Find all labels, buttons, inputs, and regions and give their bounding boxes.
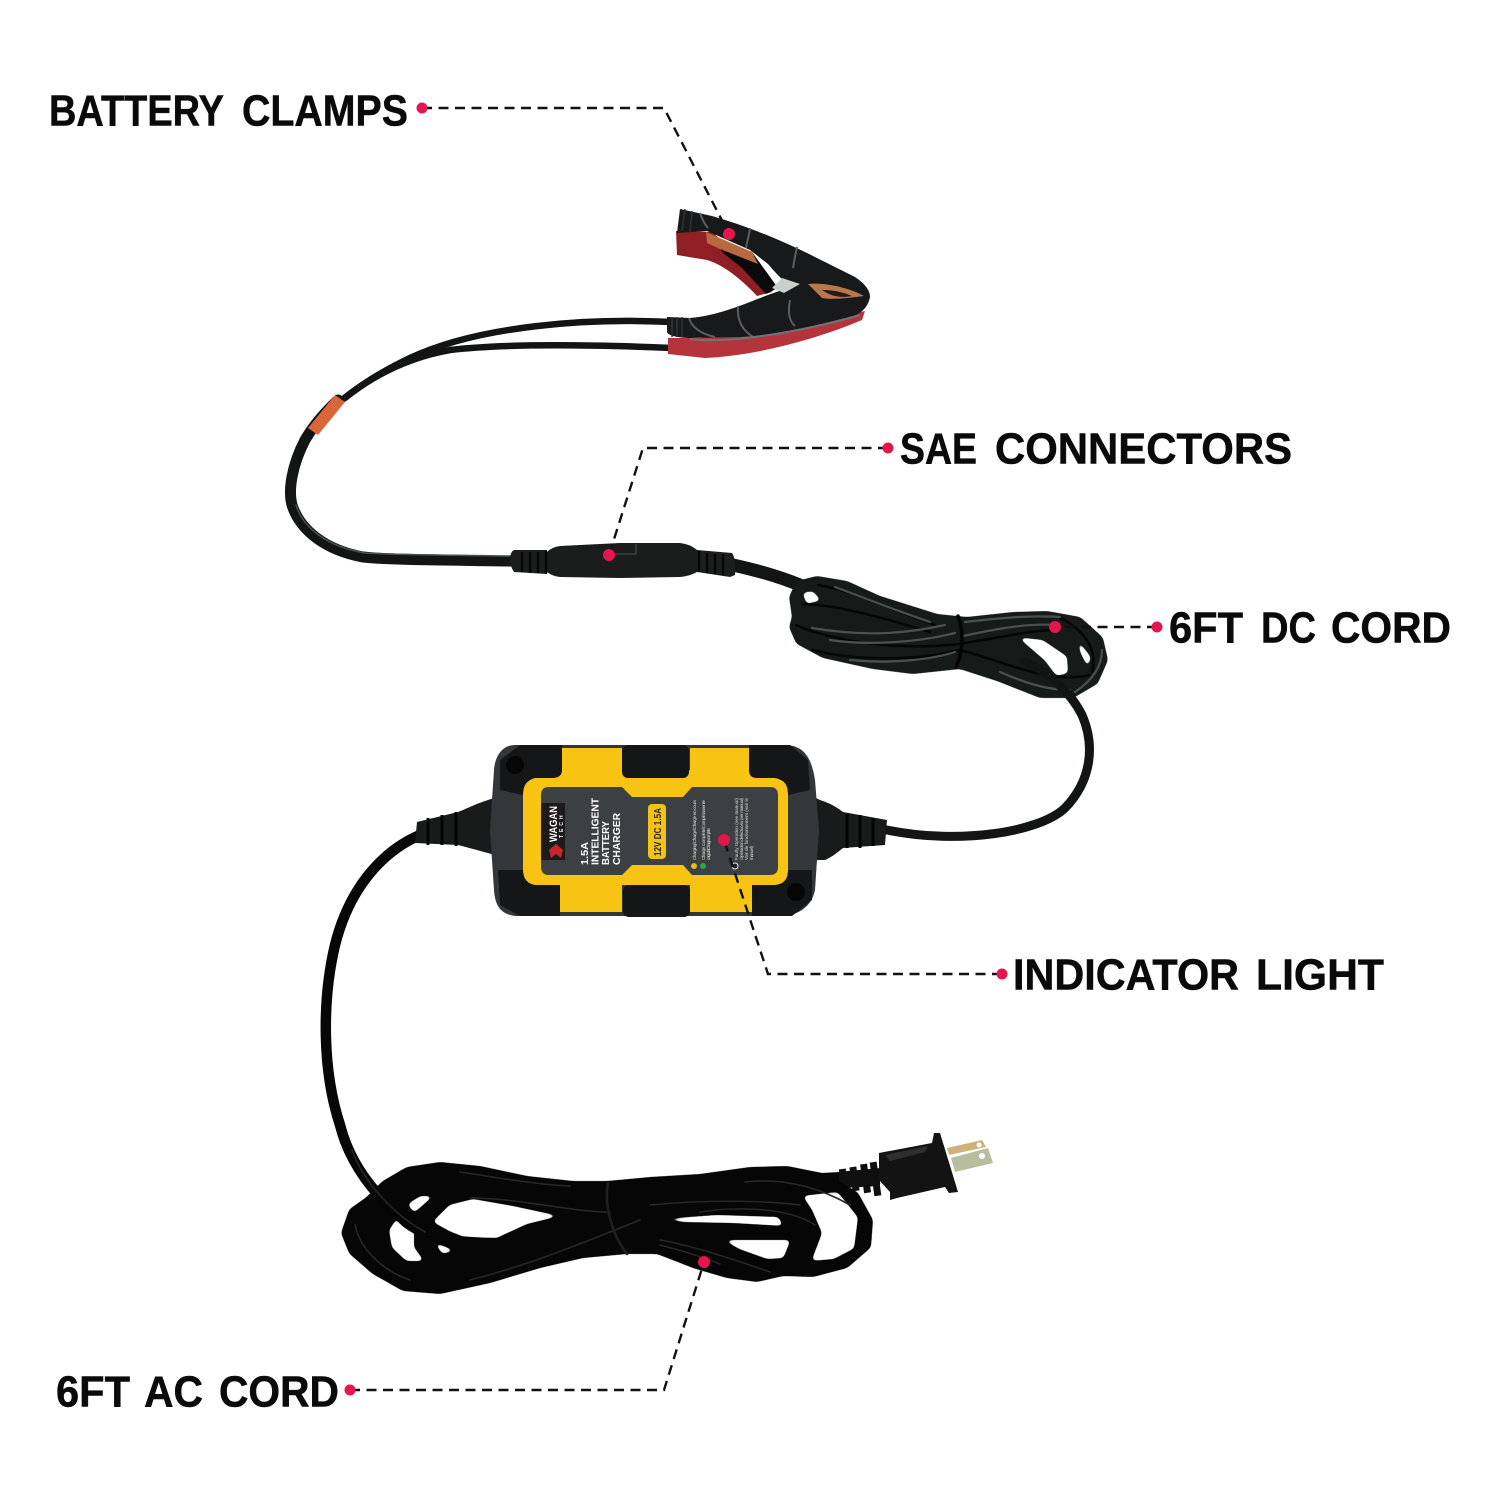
product name: CHARGER bbox=[611, 813, 623, 865]
AC plug bbox=[812, 1133, 993, 1200]
connector ribs left bbox=[510, 550, 547, 574]
red upper jaw bbox=[676, 231, 772, 296]
Wagan logo box: TECH bbox=[559, 812, 565, 838]
6ft AC cord coil bbox=[342, 1150, 872, 1293]
bottom centre pad bbox=[623, 885, 690, 917]
battery clamp leads bbox=[291, 321, 672, 561]
product name: BATTERY bbox=[600, 821, 612, 865]
plug ribbed strain relief bbox=[838, 1162, 881, 1196]
connector ribs right bbox=[697, 550, 735, 577]
top left pad bbox=[500, 745, 562, 795]
top centre pad bbox=[622, 745, 689, 778]
dark strand separators bbox=[796, 585, 1093, 677]
grey label panel bbox=[541, 787, 778, 875]
callout: AC cord: CORD bbox=[219, 1368, 339, 1416]
red lower jaw bbox=[668, 311, 865, 358]
callout: AC cord: 6FT bbox=[56, 1368, 130, 1416]
cord right of connector bbox=[733, 565, 800, 585]
indicator legend text: Charging/Charge/Charge en cours bbox=[692, 799, 697, 860]
callout: battery clamps bbox=[49, 86, 735, 240]
callout: SAE connectors bbox=[603, 424, 1292, 561]
cord end to plug bbox=[812, 1178, 850, 1180]
callout: indicator light: INDICATOR bbox=[1013, 950, 1239, 1000]
callout: indicator light: LIGHT bbox=[1256, 950, 1384, 1000]
product name: 1.5A bbox=[579, 842, 591, 865]
AC coil strand highlights bbox=[352, 1150, 850, 1280]
callout: SAE connectors: SAE bbox=[900, 424, 977, 474]
AC coil tie bbox=[607, 1183, 627, 1254]
callout: DC cord bbox=[1049, 604, 1451, 652]
6ft DC cord coil bbox=[790, 577, 1107, 836]
bottom left pad bbox=[498, 870, 560, 916]
grey strand highlights bbox=[812, 587, 1102, 692]
white LED bbox=[732, 863, 738, 869]
screw hole bottom right bbox=[787, 883, 805, 901]
right strain relief bbox=[816, 798, 887, 860]
charger bbox=[415, 745, 887, 917]
Wagan logo box: WAGAN bbox=[548, 806, 560, 842]
callout: DC cord: CORD bbox=[1331, 604, 1451, 652]
indicator legend text: Operacion defectuosa (ver manual) bbox=[739, 798, 744, 860]
yellow LED bbox=[691, 863, 697, 869]
copper jaw strip bbox=[706, 232, 758, 264]
callout: AC cord: AC bbox=[144, 1368, 203, 1416]
callout: DC cord: DC bbox=[1261, 604, 1316, 652]
connector body bbox=[547, 543, 697, 578]
callout: battery clamps: BATTERY bbox=[49, 86, 224, 136]
coil tie bbox=[956, 616, 962, 667]
Wagan logo box bbox=[541, 803, 565, 860]
voltage badge: 12V DC 1.5A bbox=[653, 808, 664, 856]
bottom right pad bbox=[752, 870, 812, 916]
charger black housing bbox=[490, 745, 819, 916]
callout: indicator light bbox=[718, 834, 1384, 1000]
top right pad bbox=[749, 745, 810, 795]
callout: DC cord: 6FT bbox=[1169, 604, 1243, 652]
DC cord to charger bbox=[887, 662, 1089, 836]
indicator legend text: Voir de fonctionnement (voir le bbox=[744, 798, 749, 860]
clamp copper tip bbox=[808, 284, 864, 299]
indicator legend text: Charge Complete/Completamente bbox=[701, 800, 706, 860]
indicator legend text bbox=[692, 798, 754, 860]
voltage badge bbox=[648, 804, 666, 859]
clamp ribbed grip bbox=[672, 209, 692, 337]
clamp grey ribs bbox=[689, 213, 860, 340]
product name: INTELLIGENT bbox=[590, 797, 602, 865]
indicator legend text: cargada/Charge complete bbox=[706, 828, 711, 860]
green LED bbox=[700, 863, 706, 869]
plug body bbox=[879, 1133, 958, 1200]
AC cord to charger bbox=[326, 835, 500, 1243]
indicator legend text: manuel) bbox=[749, 846, 754, 860]
left strain relief bbox=[415, 798, 494, 855]
red star bbox=[549, 844, 563, 858]
plug blades bbox=[947, 1140, 986, 1155]
callout: AC cord bbox=[56, 1256, 710, 1416]
clamp jaw interior bbox=[715, 238, 778, 294]
callout: battery clamps: CLAMPS bbox=[242, 86, 408, 136]
indicator legend text: Faulty Operation (see manual) bbox=[734, 798, 739, 860]
yellow shell bbox=[523, 748, 788, 912]
battery clamps bbox=[667, 209, 870, 358]
clamp pivot steel bbox=[772, 278, 800, 293]
orange tape band bbox=[308, 395, 345, 435]
callout: SAE connectors: CONNECTORS bbox=[995, 424, 1292, 474]
black clamp body bbox=[667, 209, 870, 338]
SAE connector bbox=[510, 543, 800, 585]
screw hole top left bbox=[506, 756, 524, 774]
product name bbox=[579, 797, 623, 865]
